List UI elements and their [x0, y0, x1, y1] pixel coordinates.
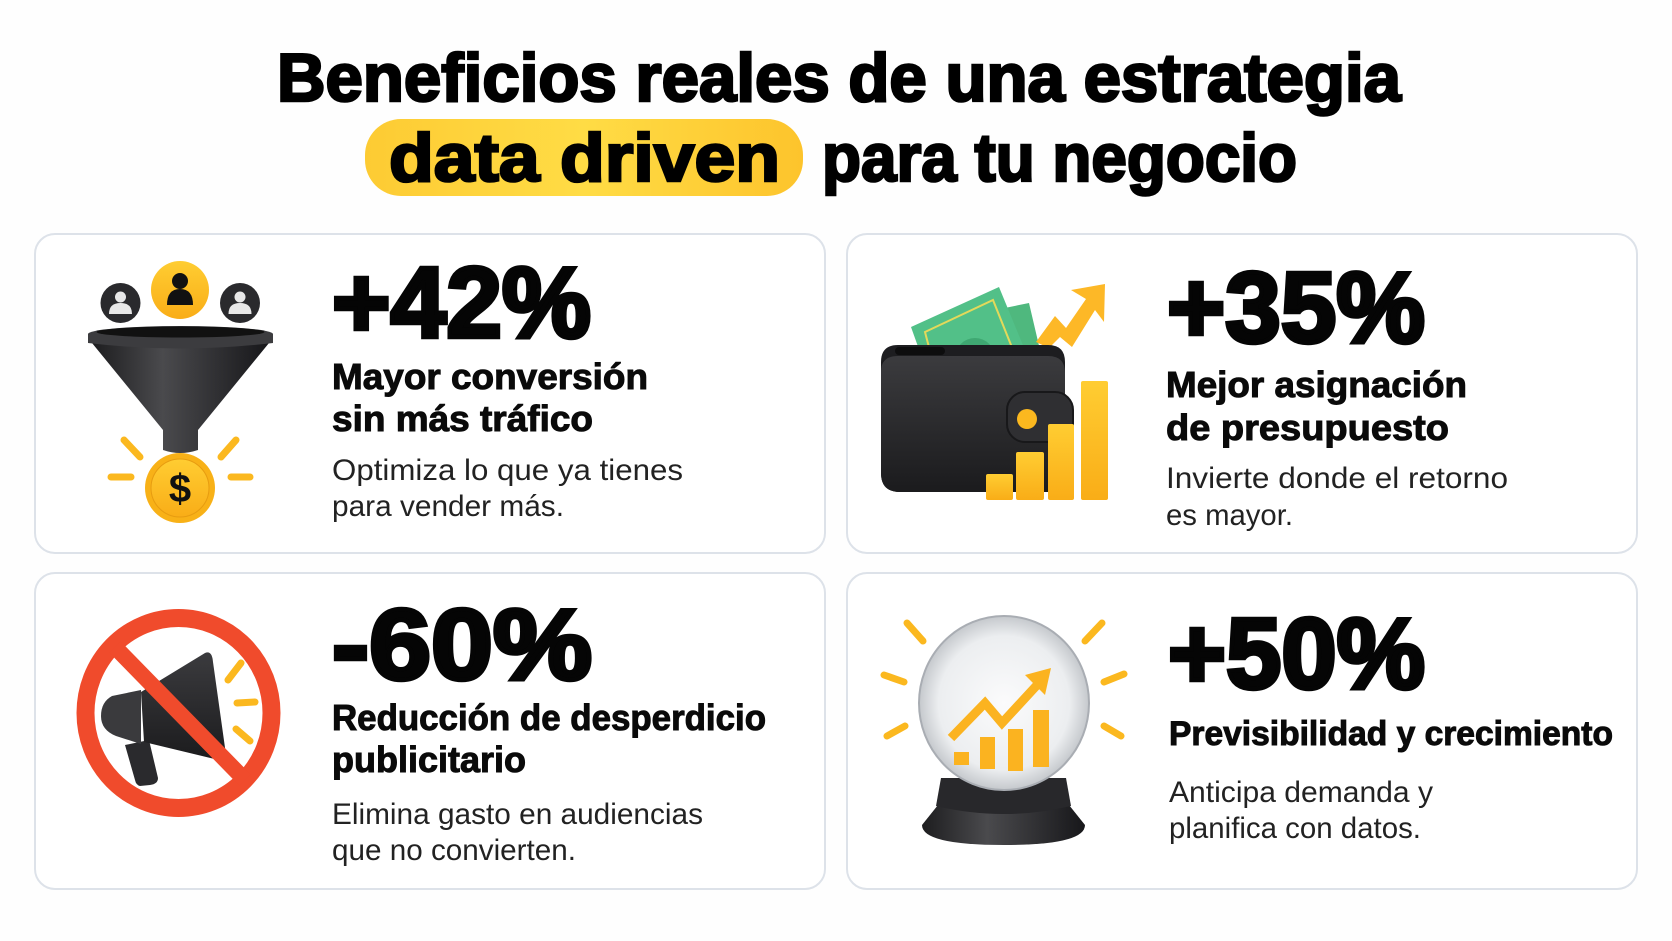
panel: mayor conversión — [35, 234, 825, 553]
description: planifica con datos. — [1169, 812, 1421, 845]
description: Anticipa demanda y — [1169, 776, 1433, 809]
highlight pill — [365, 119, 803, 196]
title: Beneficios reales de una estrategia — [277, 40, 1402, 116]
description: para vender más. — [332, 490, 564, 523]
heading — [332, 356, 648, 439]
description: Invierte donde el retorno — [1166, 462, 1508, 495]
heading: Reducción de desperdicio — [332, 697, 766, 738]
stat: +50% — [1168, 598, 1425, 710]
icon: funnel with users and coin: $ — [169, 467, 191, 511]
panel: mejor asignación — [847, 234, 1637, 553]
icon: funnel with users and coin — [88, 261, 273, 523]
heading: Mayor conversión — [332, 356, 648, 397]
icon: crystal ball with growth chart — [884, 616, 1124, 845]
stat: +42% — [332, 247, 591, 359]
description: Optimiza lo que ya tienes — [332, 454, 683, 487]
heading: Mejor asignación — [1166, 364, 1467, 405]
panel: reducción de desperdicio — [35, 573, 825, 889]
description: Elimina gasto en audiencias — [332, 798, 703, 831]
description — [332, 454, 683, 523]
stat: -60% — [332, 589, 592, 701]
description: que no convierten. — [332, 834, 576, 867]
title: data driven — [389, 120, 780, 196]
description — [332, 798, 703, 867]
title — [277, 40, 1402, 196]
heading: de presupuesto — [1166, 407, 1449, 448]
heading: Previsibilidad y crecimiento — [1169, 715, 1613, 753]
description — [1169, 776, 1433, 845]
icon: wallet with bars — [881, 284, 1108, 500]
heading — [332, 697, 766, 780]
description — [1166, 462, 1508, 532]
stat: +35% — [1167, 252, 1425, 364]
heading: publicitario — [332, 739, 526, 780]
heading: sin más tráfico — [332, 398, 593, 439]
panel: previsibilidad y crecimiento — [847, 573, 1637, 889]
title: para tu negocio — [822, 120, 1297, 196]
heading — [1166, 364, 1467, 448]
icon: crossed-out megaphone — [86, 618, 272, 808]
description: es mayor. — [1166, 499, 1293, 532]
